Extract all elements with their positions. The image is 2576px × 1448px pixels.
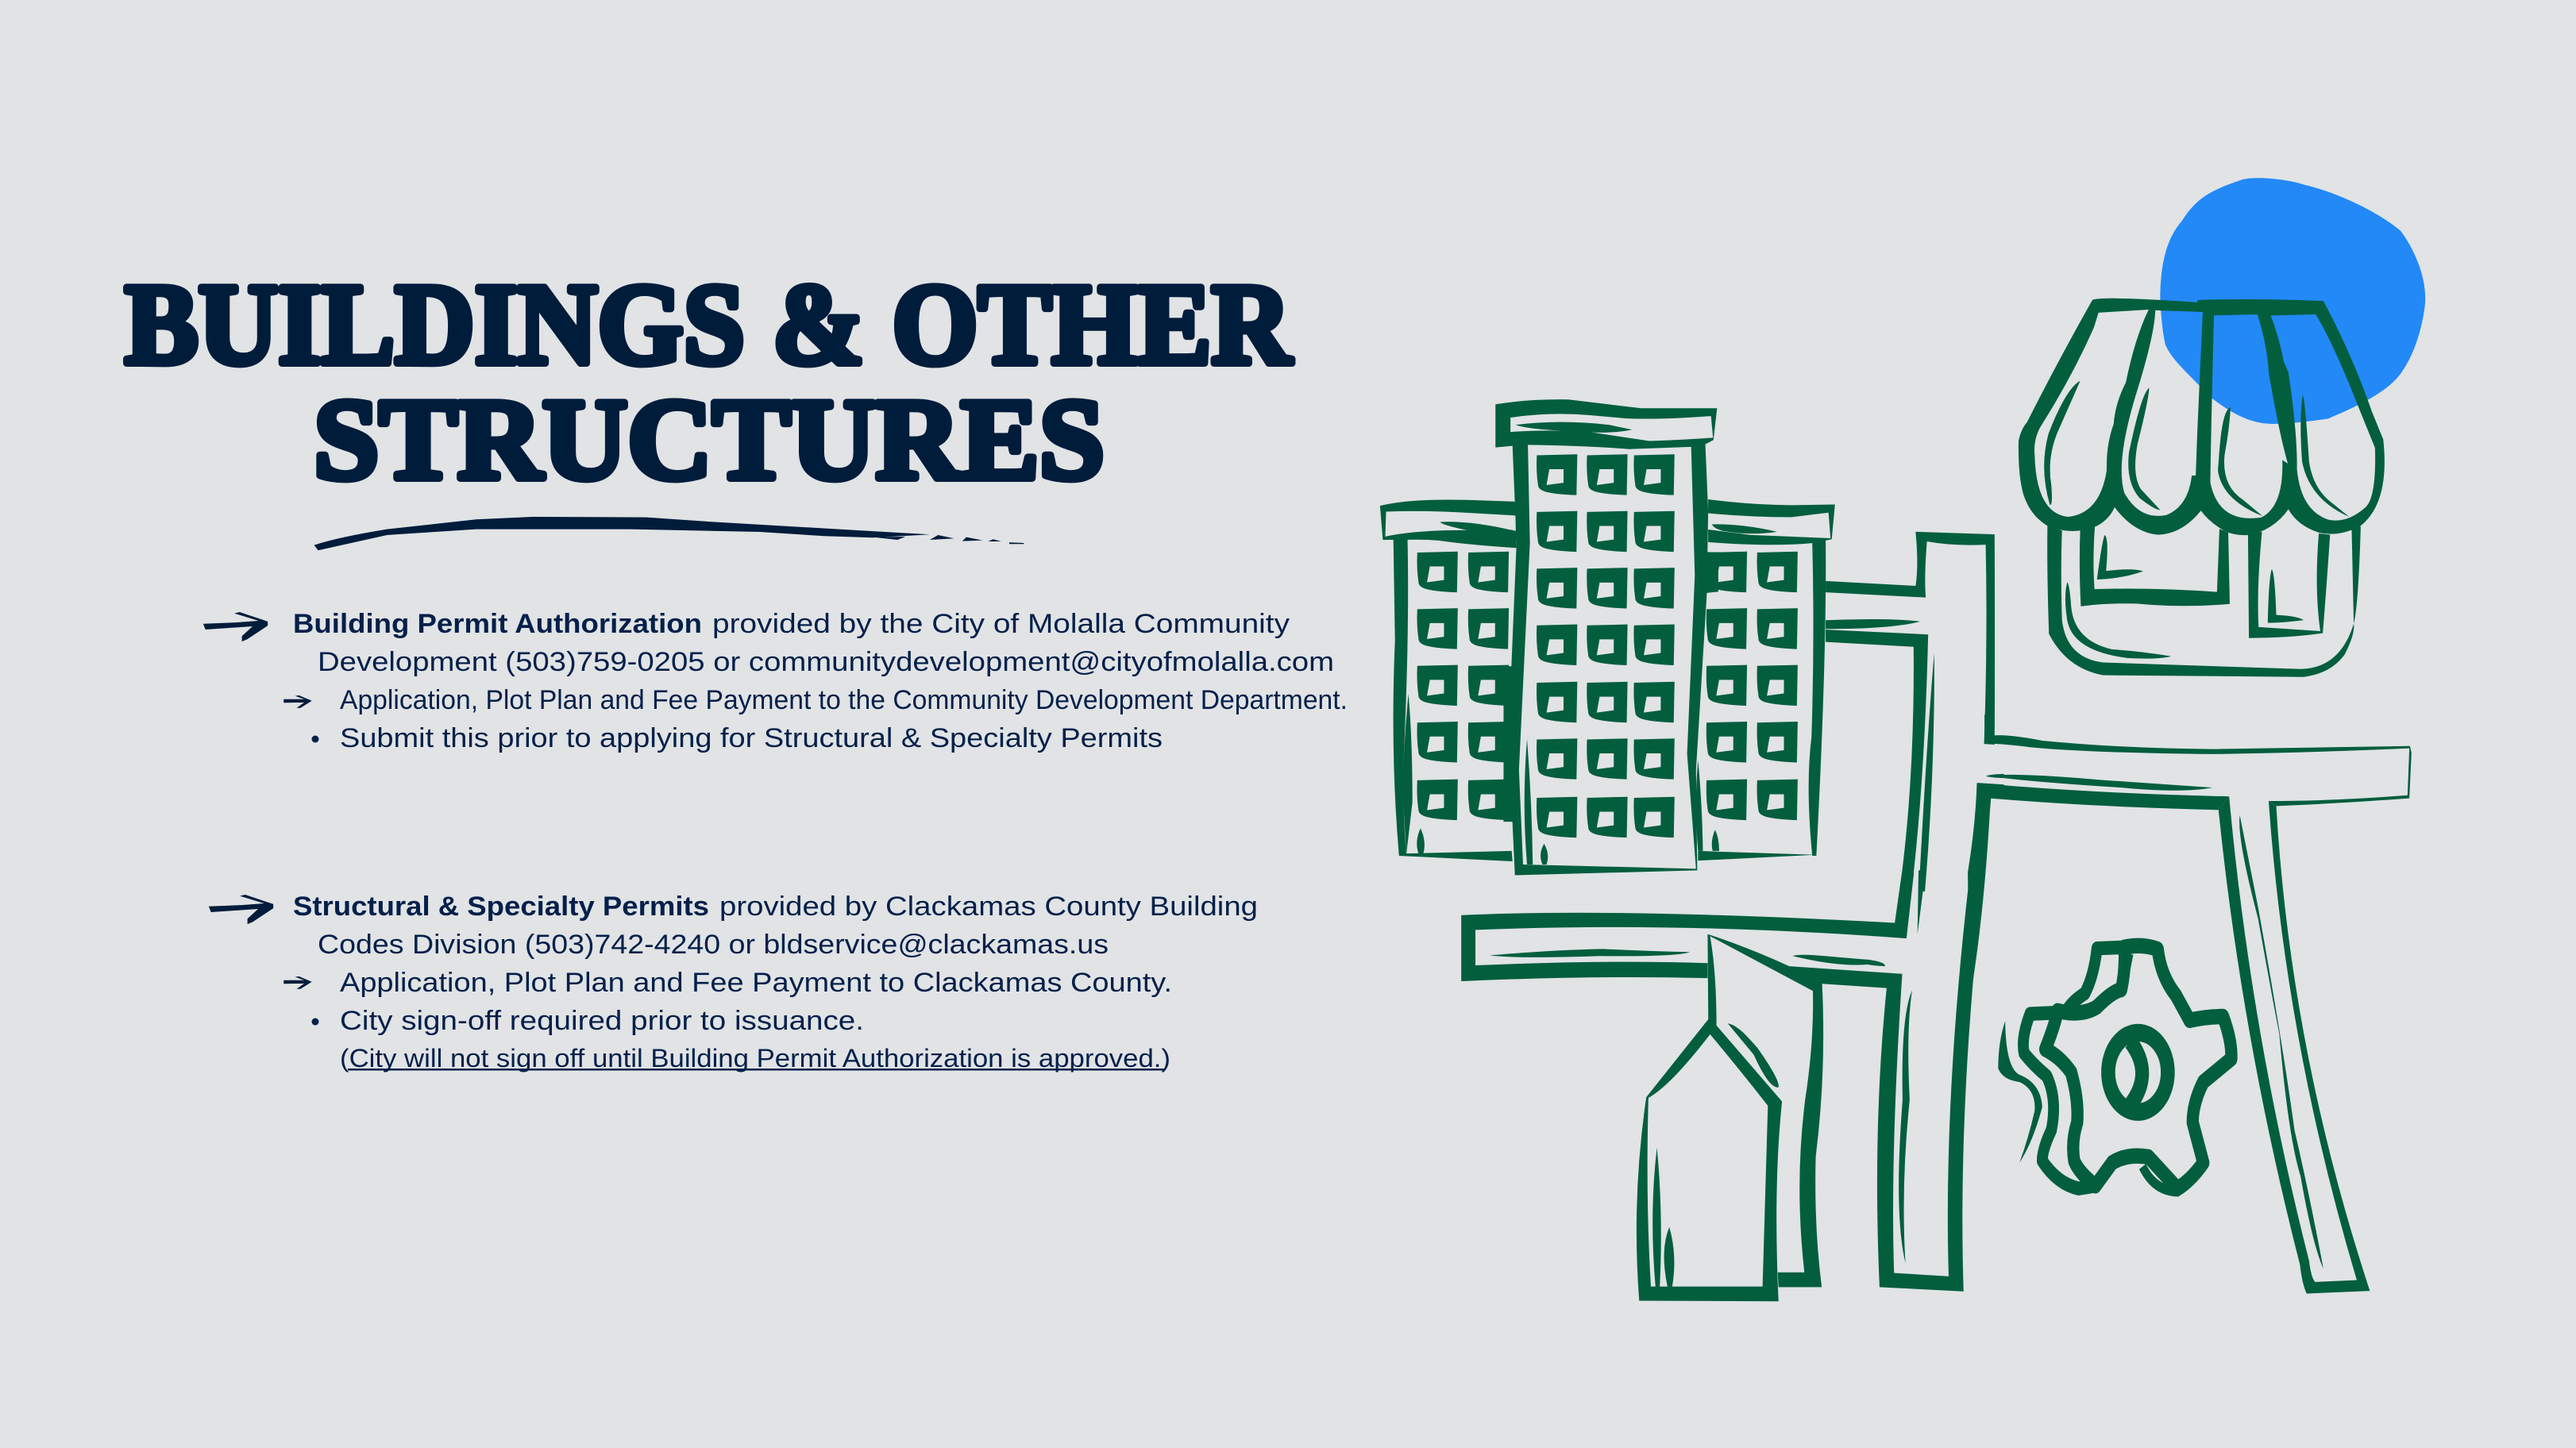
arrow: county application step <box>283 976 312 989</box>
icon: storefront with awning <box>2019 298 2385 677</box>
road: right section <box>1968 714 2412 1293</box>
contact line: community development: Development (503)759-0205 or communitydevelopment@cityofmolalla.com <box>318 647 1334 677</box>
heading line: building permit: Building Permit Authorization <box>293 609 702 639</box>
illustration: city buildings, roads, shop and gear <box>1380 178 2425 1301</box>
step: application to community development: Application, Plot Plan and Fee Payment to the Community Development Department. <box>340 685 1348 715</box>
contact line: county: Codes Division (503)742-4240 or bldservice@clackamas.us <box>318 930 1109 960</box>
step: submit prior: Submit this prior to applying for Structural & Specialty Permits <box>340 723 1163 753</box>
shop door <box>2248 532 2330 638</box>
arrow: application step <box>283 695 312 708</box>
heading line: structural permit: Structural & Specialty Permits <box>293 892 709 922</box>
heading line: building permit: provided by the City of Molalla Community <box>712 609 1290 639</box>
icon: gear <box>1998 945 2231 1192</box>
title: STRUCTURES <box>314 375 1105 503</box>
section: building permit authorization <box>203 609 1348 753</box>
shop window <box>2080 526 2230 607</box>
left building <box>1380 499 1517 861</box>
step: city sign-off: City sign-off required prior to issuance. <box>340 1006 864 1036</box>
road: upper-left section and tower connector <box>1826 532 2004 892</box>
central tower <box>1495 399 1717 876</box>
title <box>125 260 1292 503</box>
heading line: building permit <box>293 609 1290 639</box>
blue blob <box>2160 178 2425 424</box>
bullet <box>311 1018 319 1026</box>
heading line: structural permit: provided by Clackamas County Building <box>719 892 1258 922</box>
shop wall <box>2047 526 2361 677</box>
arrow: building permit <box>203 612 268 641</box>
brush stroke underline <box>314 517 1024 550</box>
awning <box>2019 298 2385 535</box>
arrow: structural permit <box>209 895 273 924</box>
bullet <box>311 735 319 743</box>
step: application to county: Application, Plot Plan and Fee Payment to Clackamas County. <box>340 968 1172 998</box>
road: lower-left section and small house <box>1461 870 1984 1301</box>
right building <box>1696 499 1835 861</box>
heading line: structural permit <box>293 892 1258 922</box>
note: underlined condition: (City will not sign off until Building Permit Authorization is approved.) <box>340 1044 1170 1073</box>
section: structural and specialty permits <box>209 892 1258 1073</box>
title: BUILDINGS & OTHER <box>125 260 1292 389</box>
